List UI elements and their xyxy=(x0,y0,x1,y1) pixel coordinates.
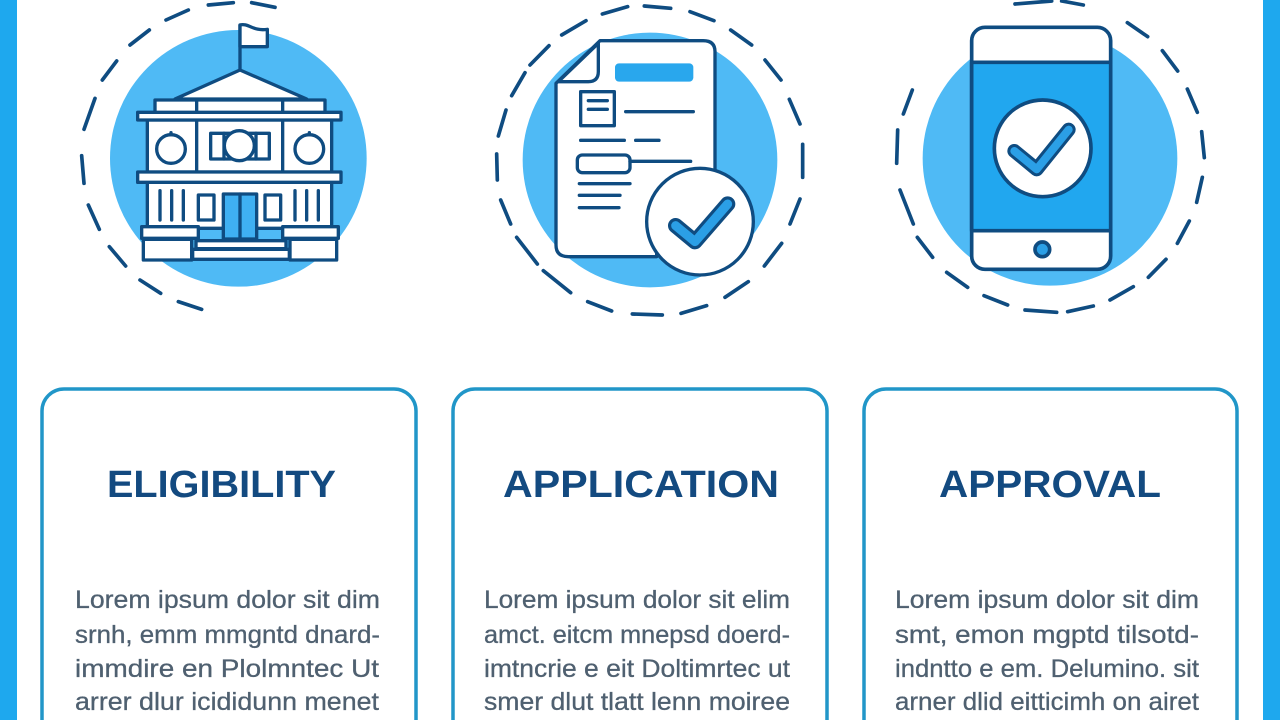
icon: phone with check xyxy=(897,1,1204,312)
text block: eligibility: arrer dlur icididunn menet xyxy=(75,688,379,716)
heading: approval: APPROVAL xyxy=(939,464,1161,506)
text block: application: amct. eitcm mnepsd doerd- xyxy=(484,621,790,649)
text block: application: Lorem ipsum dolor sit elim xyxy=(484,586,790,614)
text block: eligibility: immdire en Plolmntec Ut xyxy=(75,655,379,683)
heading: eligibility: ELIGIBILITY xyxy=(107,464,336,506)
heading: application: APPLICATION xyxy=(503,464,779,506)
text block: approval: indntto e em. Delumino. sit xyxy=(895,655,1199,683)
text block: application: imtncrie e eit Doltimrtec ut xyxy=(484,655,790,683)
icon: application document with check xyxy=(497,6,803,315)
text block: approval: arner dlid eitticimh on airet xyxy=(895,688,1199,716)
text block: approval: smt, emon mgptd tilsotd- xyxy=(895,621,1199,649)
text block: eligibility: srnh, emm mmgntd dnard- xyxy=(75,621,380,649)
text block: application: smer dlut tlatt lenn moiree xyxy=(484,688,790,716)
text block: application xyxy=(484,586,790,716)
icon: government building xyxy=(82,3,367,309)
right frame bar xyxy=(1263,0,1280,720)
text block: approval: Lorem ipsum dolor sit dim xyxy=(895,586,1199,614)
panel: application xyxy=(453,389,827,720)
panel: approval xyxy=(864,389,1237,720)
text block: approval xyxy=(895,586,1199,716)
text block: eligibility: Lorem ipsum dolor sit dim xyxy=(75,586,380,614)
panel: eligibility xyxy=(42,389,416,720)
text block: eligibility xyxy=(75,586,380,716)
left frame bar xyxy=(0,0,17,720)
